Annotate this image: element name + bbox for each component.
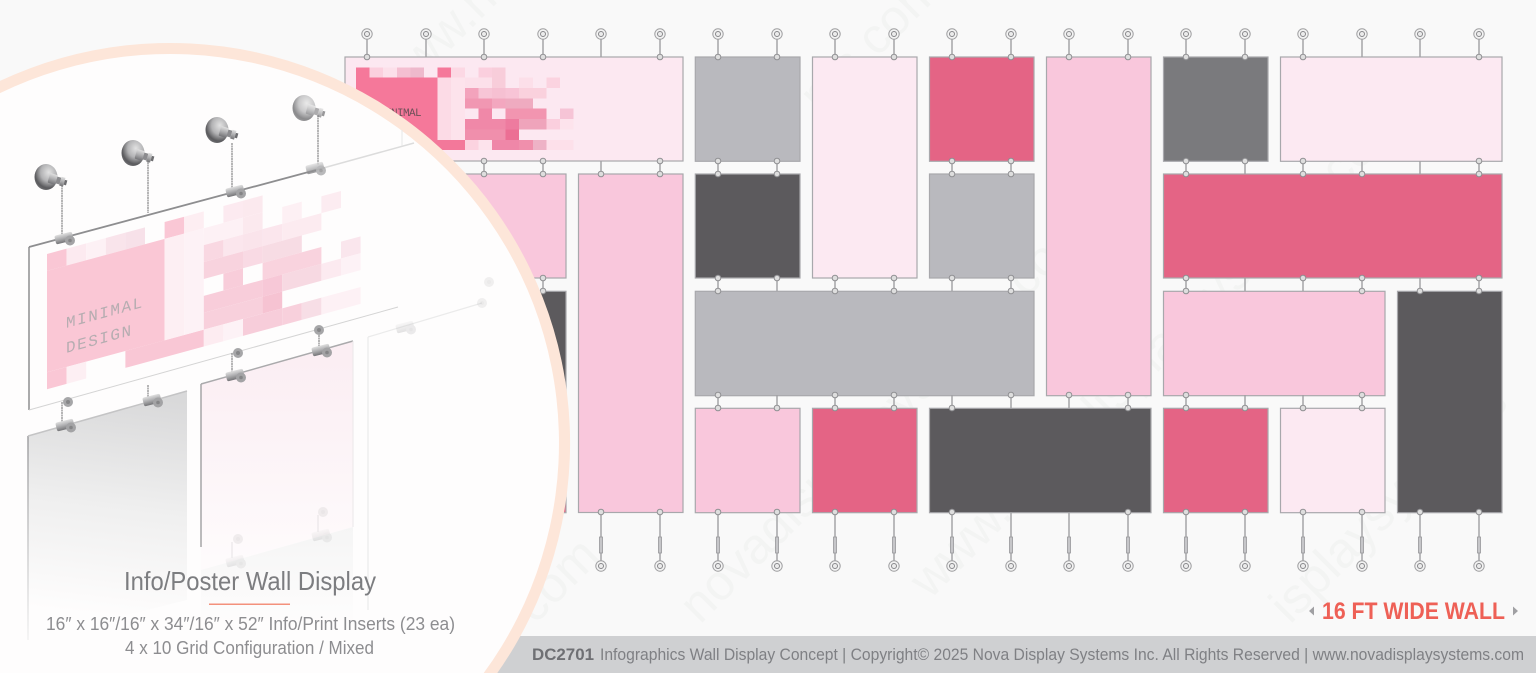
footer text: DC2701: [532, 645, 594, 664]
insert size specs: 16″ x 16″/16″ x 34″/16″ x 52″ Info/Print Inserts (23 ea): [46, 614, 455, 634]
close-up: faint panel below pink: [201, 527, 353, 636]
close-up: faint right panel edges: [368, 303, 482, 610]
close-up: MINIMAL DESIGN poster: [29, 130, 414, 410]
title underline: [209, 604, 290, 605]
panel: dark square: [695, 174, 800, 278]
panel: pink square: [695, 408, 800, 513]
panel: light pink square: [1280, 408, 1385, 513]
panel: wide hot pink: [1164, 174, 1502, 278]
panel: tall light pink: [812, 57, 917, 278]
magnifier circle with peach ring: [0, 43, 570, 673]
grid configuration: 4 x 10 Grid Configuration / Mixed: [125, 638, 374, 658]
close-up: panel clamps: [54, 161, 416, 433]
top wall anchors: [362, 29, 1484, 39]
panel: hot pink bottom: [1164, 408, 1268, 513]
watermark text: novadisplaysystems.com: [668, 200, 1101, 633]
panel: gray row 2: [930, 174, 1034, 278]
watermark text: com: [503, 526, 610, 633]
close-up: faint lower hardware: [225, 277, 494, 568]
panel: gray top: [695, 57, 800, 161]
cable grippers on panel edges: [364, 54, 1482, 515]
wall display panels: [345, 57, 1502, 513]
suspension cables: [367, 34, 1479, 566]
panel: row 2 wide pink: [345, 174, 566, 278]
bottom wall anchors and tensioners: [596, 537, 1484, 571]
panel: tall pink column: [578, 174, 683, 512]
panel: wide pink row 3: [1164, 291, 1385, 396]
watermark text: [362, 0, 1518, 633]
watermark text: isplaysystems: [1258, 373, 1518, 633]
close-up: wall standoff knobs: [34, 95, 326, 190]
panel: wide dark bottom: [930, 408, 1151, 513]
panel: tall pink center: [1046, 57, 1151, 396]
close-up: MINIMAL DESIGN poster: MINIMAL: [66, 293, 144, 333]
panel: wide gray: [695, 291, 1034, 396]
panel: tall dark right: [1398, 291, 1502, 513]
close-up: cables: [62, 115, 319, 425]
panel: row 4 hot pink: [461, 408, 566, 513]
wall display title: Info/Poster Wall Display: [124, 566, 376, 596]
panel: wide top-left poster: MINIMAL: [379, 108, 421, 120]
panel: hot pink square: [812, 408, 917, 513]
footer bar: [0, 636, 1536, 673]
panel: row 3 dark: [461, 291, 566, 396]
panel: wide top-left poster: [345, 57, 683, 161]
panel: wide light pink right: [1280, 57, 1502, 161]
close-up: gray lower panel: [28, 391, 187, 640]
wall width callout: 16 FT WIDE WALL: [1322, 598, 1505, 625]
close-up: MINIMAL DESIGN poster: DESIGN: [66, 321, 133, 358]
close-up: pink lower panel: [201, 341, 353, 570]
panel: hot pink top: [930, 57, 1034, 161]
isometric hardware close-up: [28, 95, 494, 640]
watermark text: www.novadisplaysystems.com: [897, 91, 1415, 608]
panel: charcoal top: [1164, 57, 1268, 161]
